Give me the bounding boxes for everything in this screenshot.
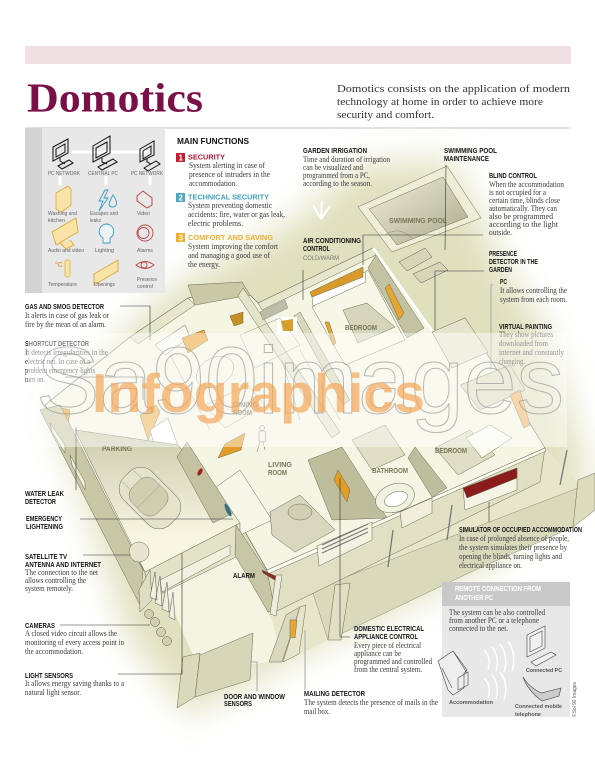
label: shortcut detector: turn on. bbox=[25, 375, 45, 384]
label: swimming pool maintenance: SWIMMING POOL bbox=[444, 148, 498, 155]
side wall bbox=[40, 405, 143, 605]
label: cameras: monitoring of every access point in bbox=[25, 638, 124, 647]
function 2: technical security: System preventing domestic bbox=[188, 201, 272, 210]
room labels: ROOM bbox=[233, 410, 252, 417]
function 2: technical security: accidents: fire, water or gas leak, bbox=[188, 210, 285, 219]
panel: system icons: Presence bbox=[137, 277, 157, 283]
icon: connected mobile telephone bbox=[523, 677, 561, 701]
label: simulator of occupied accommodation: the system simulates their presence by bbox=[459, 543, 567, 552]
icon: alarm bbox=[137, 225, 153, 241]
panel: remote connection bbox=[438, 582, 570, 718]
label: shortcut detector: problem emergency lights bbox=[25, 366, 95, 375]
panel: system icons: Audio and video bbox=[48, 248, 84, 254]
label: gas and smog detector: fire by the mean of an alarm. bbox=[25, 320, 106, 329]
panel: system icons bbox=[25, 128, 165, 293]
main functions: MAIN FUNCTIONS bbox=[177, 136, 249, 146]
cameras bbox=[144, 572, 175, 646]
intro text bbox=[337, 83, 571, 121]
driveway bbox=[165, 555, 282, 672]
label: domestic electrical appliance control: from the central system. bbox=[354, 665, 422, 674]
label: emergency lightening bbox=[26, 516, 63, 531]
function 1: security: SECURITY bbox=[188, 152, 225, 162]
function 2: technical security: electric problems. bbox=[188, 219, 243, 228]
label: shortcut detector bbox=[25, 341, 108, 384]
function 1: security: accommodation. bbox=[189, 179, 237, 188]
label: alarm: ALARM bbox=[233, 573, 255, 580]
left room items bbox=[58, 405, 178, 458]
room labels: PARKING bbox=[102, 446, 133, 453]
panel: system icons: leaks bbox=[90, 218, 101, 224]
intro text: technology at home in order to achieve more bbox=[337, 96, 543, 108]
title: Domotics bbox=[27, 74, 203, 120]
label: mailing detector: The system detects the presence of mails in the bbox=[304, 698, 438, 707]
label: simulator of occupied accommodation: opening the blinds, turning lights and bbox=[459, 552, 562, 561]
light posts bbox=[388, 450, 567, 567]
label: mailing detector: mail box. bbox=[304, 707, 330, 716]
label: blind control: outside. bbox=[489, 228, 512, 237]
icon: pc network right bbox=[140, 141, 160, 171]
function 1: security: presence of intruders in the bbox=[189, 170, 270, 179]
label: presence detector bbox=[489, 251, 538, 274]
panel: system icons: Openings bbox=[94, 282, 115, 288]
label: garden irrigation: according to the season. bbox=[303, 179, 372, 188]
label: garden irrigation: programmed from a PC, bbox=[303, 171, 370, 180]
label: water leak detector bbox=[25, 491, 64, 506]
panel: remote connection: Connected mobile bbox=[515, 704, 562, 710]
label: pc bbox=[500, 279, 567, 304]
label: mailing detector: MAILING DETECTOR bbox=[304, 691, 365, 698]
icon: eye bbox=[136, 262, 154, 268]
credit: ©Sol 90 Images bbox=[571, 682, 578, 717]
icon: water and lightning bbox=[99, 190, 117, 211]
leader lines bbox=[60, 165, 489, 674]
label: door and window sensors: DOOR AND WINDOW bbox=[224, 694, 285, 701]
intro text: security and comfort. bbox=[337, 109, 434, 121]
ground glow bbox=[50, 160, 590, 715]
room labels bbox=[102, 218, 467, 477]
function 2: technical security bbox=[176, 192, 285, 228]
label: water leak detector: WATER LEAK bbox=[25, 491, 64, 498]
panel: system icons: Escapes and bbox=[90, 211, 118, 217]
label: garden irrigation: Time and duration of irrigation bbox=[303, 155, 390, 164]
panel: remote connection: Accommodation bbox=[449, 700, 494, 706]
bathroom wedge walls bbox=[308, 425, 447, 520]
function 3: comfort and saving: 3 bbox=[178, 234, 184, 242]
label: cameras: A closed video circuit allows the bbox=[25, 629, 117, 638]
watermark text: Sa90images bbox=[36, 328, 564, 434]
panel: remote connection: Connected PC bbox=[526, 668, 562, 674]
panel: system icons: Lighting bbox=[95, 248, 114, 254]
label: blind control: according to the light bbox=[489, 220, 559, 229]
label: virtual painting: VIRTUAL PAINTING bbox=[499, 324, 552, 331]
icon: signal waves bbox=[484, 641, 514, 700]
label: shortcut detector: SHORTCUT DETECTOR bbox=[25, 341, 89, 348]
right bedroom bbox=[432, 318, 530, 475]
label: blind control: also be programmed bbox=[489, 212, 553, 221]
label: blind control: is not occupied for a bbox=[489, 188, 546, 197]
label: pc: system from each room. bbox=[500, 295, 567, 304]
panel: system icons: Temperature bbox=[48, 282, 77, 288]
low garden wall strip bbox=[312, 488, 578, 640]
living room bbox=[205, 433, 335, 552]
panel: system icons: control bbox=[137, 284, 153, 290]
radiator and orange unit bbox=[260, 300, 297, 335]
panel: remote connection: from another PC or a telephone bbox=[449, 616, 539, 625]
panel: system icons: PC NETWORK bbox=[48, 171, 80, 177]
label: virtual painting: internet and constantly bbox=[499, 348, 564, 357]
panel: system icons: CENTRAL PC bbox=[88, 171, 118, 177]
label: shortcut detector: electric net. In case of a bbox=[25, 357, 90, 366]
dining room furniture bbox=[170, 318, 340, 430]
label: virtual painting: downloaded from bbox=[499, 339, 549, 348]
function 3: comfort and saving: COMFORT AND SAVING bbox=[188, 233, 273, 242]
panel: system icons: Alarms bbox=[137, 248, 153, 254]
icon: washing machine bbox=[56, 186, 71, 212]
person bbox=[257, 426, 266, 452]
icon: thermometer bbox=[55, 260, 70, 277]
label: virtual painting: They show pictures bbox=[499, 330, 553, 339]
upper wall bands bbox=[130, 248, 376, 438]
function 2: technical security: 2 bbox=[178, 194, 184, 202]
label: domestic electrical appliance control: programmed and controlled bbox=[354, 657, 432, 666]
room labels: SWIMMING POOL bbox=[389, 218, 448, 225]
label: satellite tv bbox=[25, 554, 102, 593]
label: swimming pool maintenance bbox=[444, 148, 498, 163]
label: satellite tv: ANTENNA AND INTERNET bbox=[25, 562, 102, 569]
label: blind control bbox=[489, 173, 564, 237]
label: gas and smog detector: GAS AND SMOG DETECTOR bbox=[25, 304, 104, 311]
function 3: comfort and saving: the energy. bbox=[188, 260, 220, 269]
label: door and window sensors bbox=[224, 694, 285, 708]
function 1: security: 1 bbox=[178, 154, 184, 162]
function 3: comfort and saving: System improving the comfort bbox=[188, 242, 279, 251]
label: shortcut detector: It detects irregularities in the bbox=[25, 348, 108, 357]
label: virtual painting: changing. bbox=[499, 357, 525, 366]
room labels: DINING bbox=[233, 402, 259, 409]
watermark text: Infographics bbox=[92, 362, 425, 424]
label: blind control: BLIND CONTROL bbox=[489, 173, 538, 180]
label: air conditioning control: AIR CONDITIONING bbox=[303, 238, 361, 245]
function 3: comfort and saving bbox=[176, 233, 279, 269]
panel: remote connection: The system can be also controlled bbox=[449, 608, 545, 617]
panel: system icons: Washing and bbox=[48, 211, 77, 217]
irrigation sprinkler bbox=[313, 201, 330, 219]
label: domestic electrical appliance control: DOMESTIC ELECTRICAL bbox=[354, 626, 425, 633]
label: cameras bbox=[25, 623, 124, 656]
function 1: security bbox=[176, 152, 270, 188]
icon: central pc bbox=[93, 136, 117, 170]
label: garden irrigation: can be visualized and bbox=[303, 163, 363, 172]
room labels: ROOM bbox=[268, 470, 287, 477]
label: light sensors: natural light sensor. bbox=[25, 688, 81, 697]
function 2: technical security: TECHNICAL SECURITY bbox=[188, 192, 269, 202]
gate and garden wall bbox=[177, 473, 595, 708]
label: air conditioning control: COLD/WARM bbox=[303, 255, 339, 262]
label: domestic electrical appliance control: appliance can be bbox=[354, 649, 401, 658]
panel: system icons: Video bbox=[137, 211, 150, 217]
label: simulator of occupied accommodation: In case of prolonged absence of people, bbox=[459, 534, 569, 543]
garage bbox=[75, 430, 240, 572]
front house wall bbox=[267, 448, 546, 612]
label: satellite tv: allows controlling the bbox=[25, 576, 86, 585]
label: presence detector: PRESENCE bbox=[489, 251, 517, 258]
label: presence detector: DETECTOR IN THE bbox=[489, 259, 538, 266]
floor plate bbox=[45, 248, 545, 572]
label: cameras: CAMERAS bbox=[25, 623, 55, 630]
panel: system icons: kitchen bbox=[48, 218, 65, 224]
room labels: LIVING bbox=[268, 462, 293, 469]
sun loungers bbox=[399, 248, 448, 283]
front garage wall bbox=[129, 523, 240, 612]
label: domestic electrical appliance control: APPLIANCE CONTROL bbox=[354, 634, 419, 641]
label: light sensors: It allows energy saving thanks to a bbox=[25, 679, 124, 688]
function 1: security: System alerting in case of bbox=[189, 161, 265, 170]
icon: lamp bbox=[99, 224, 114, 243]
icon: house bbox=[438, 651, 468, 695]
label: pc: PC bbox=[500, 279, 507, 286]
label: blind control: certain time, blinds close bbox=[489, 196, 560, 205]
label: virtual painting bbox=[499, 324, 564, 366]
room labels: BATHROOM bbox=[372, 468, 408, 475]
label: satellite tv: The connection to the net bbox=[25, 568, 99, 577]
kitchen bbox=[155, 312, 243, 355]
room labels: BEDROOM bbox=[345, 325, 377, 332]
label: simulator of occupied accommodation: electrical appliance on. bbox=[459, 561, 522, 570]
label: emergency lightening: LIGHTENING bbox=[26, 524, 63, 531]
label: blind control: automatically. They can bbox=[489, 204, 557, 213]
header band bbox=[25, 46, 571, 64]
icon: connected pc bbox=[527, 626, 556, 666]
panel: remote connection: ANOTHER PC bbox=[455, 595, 493, 602]
function 3: comfort and saving: and managing a good use of bbox=[188, 251, 270, 260]
label: pc: It allows controlling the bbox=[500, 286, 567, 295]
label: swimming pool maintenance: MAINTENANCE bbox=[444, 156, 489, 163]
house illustration bbox=[40, 166, 595, 708]
label: presence detector: GARDEN bbox=[489, 267, 512, 274]
icon: pc network bbox=[53, 139, 73, 169]
label: emergency lightening: EMERGENCY bbox=[26, 516, 62, 523]
icon: openings bbox=[94, 260, 118, 285]
label: domestic electrical appliance control: Every piece of electrical bbox=[354, 641, 422, 650]
label: air conditioning control: CONTROL bbox=[303, 246, 331, 253]
label: domestic electrical appliance control bbox=[354, 626, 432, 674]
label: light sensors bbox=[25, 673, 124, 697]
alarm wall recess bbox=[235, 525, 276, 612]
label: satellite tv: SATELLITE TV bbox=[25, 554, 67, 561]
watermark band bbox=[28, 333, 567, 447]
label: light sensors: LIGHT SENSORS bbox=[25, 673, 73, 680]
intro text: Domotics consists on the application of modern bbox=[337, 83, 571, 95]
label: door and window sensors: SENSORS bbox=[224, 701, 252, 708]
label: water leak detector: DETECTOR bbox=[25, 499, 56, 506]
panel: remote connection: REMOTE CONNECTION FROM bbox=[455, 586, 541, 593]
main functions bbox=[176, 136, 285, 269]
front garden bbox=[140, 448, 595, 662]
label: gas and smog detector bbox=[25, 304, 109, 329]
bedroom bbox=[310, 255, 424, 365]
label: simulator of occupied accommodation bbox=[459, 527, 582, 570]
label: garden irrigation bbox=[303, 148, 390, 188]
panel: remote connection: telephone bbox=[515, 712, 541, 718]
label: blind control: When the accommodation bbox=[489, 180, 564, 189]
label: cameras: the accommodation. bbox=[25, 647, 83, 656]
label: mailing detector bbox=[304, 691, 438, 716]
room labels: BEDROOM bbox=[435, 448, 467, 455]
panel: remote connection: connected to the net. bbox=[449, 624, 508, 633]
icon: video camera bbox=[137, 191, 152, 208]
icon: television bbox=[52, 218, 78, 249]
label: satellite tv: system remotely. bbox=[25, 584, 73, 593]
label: air conditioning control bbox=[303, 238, 361, 262]
label: gas and smog detector: It alerts in case of gas leak or bbox=[25, 311, 109, 320]
car bbox=[113, 461, 187, 535]
icon: thermometer: °C bbox=[55, 261, 63, 269]
panel: system icons: PC NETWORK bbox=[131, 171, 163, 177]
label: garden irrigation: GARDEN IRRIGATION bbox=[303, 148, 367, 155]
swimming pool bbox=[358, 166, 481, 252]
